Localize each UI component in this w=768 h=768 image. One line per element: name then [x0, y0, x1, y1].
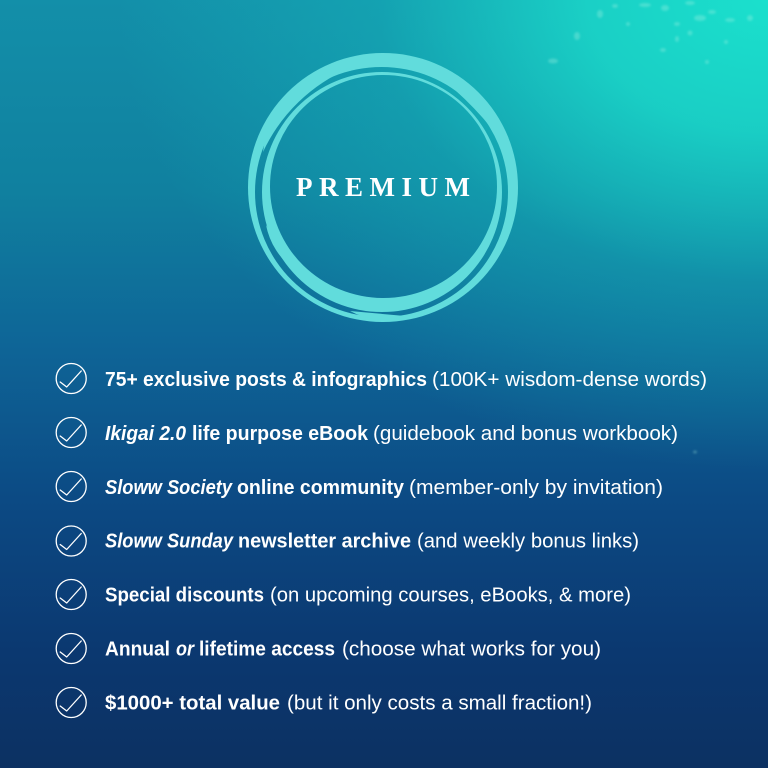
icon: check circle [56, 526, 86, 556]
list item 7 [56, 688, 592, 718]
list item 6 [56, 634, 601, 664]
background bubbles [548, 1, 753, 454]
list item 4: (and weekly bonus links) [417, 530, 639, 552]
icon: check circle [56, 580, 86, 610]
list item 7: (but it only costs a small fraction!) [287, 692, 592, 714]
circle emblem [248, 53, 518, 322]
list item 6: or [176, 638, 195, 660]
list item 4: newsletter archive [238, 530, 411, 552]
list item 2: life purpose eBook [192, 423, 369, 445]
title: PREMIUM [296, 172, 470, 202]
icon: check circle [56, 472, 86, 502]
icon: check circle [56, 634, 86, 664]
list item 4: Sloww Sunday [105, 530, 234, 552]
icon: check circle [56, 418, 86, 448]
icon: check circle [56, 688, 86, 718]
list item 5: (on upcoming courses, eBooks, & more) [270, 584, 631, 606]
icon: check circle [56, 364, 86, 394]
list item 3 [56, 472, 663, 502]
list item 6: Annual [105, 638, 170, 660]
list item 1: 75+ exclusive posts & infographics [105, 369, 427, 391]
list item 6: (choose what works for you) [342, 638, 601, 660]
list item 2: Ikigai 2.0 [105, 423, 186, 445]
list item 2: (guidebook and bonus workbook) [373, 423, 678, 445]
list item 1 [56, 364, 707, 394]
list item 7: $1000+ total value [105, 692, 280, 714]
list item 2 [56, 418, 678, 448]
list item 3: online community [237, 477, 405, 499]
list item 3: Sloww Society [105, 477, 233, 499]
list item 6: lifetime access [199, 638, 335, 660]
list item 5 [56, 580, 631, 610]
list item 1: (100K+ wisdom-dense words) [432, 369, 707, 391]
list item 4 [56, 526, 639, 556]
list item 5: Special discounts [105, 584, 264, 606]
list item 3: (member-only by invitation) [409, 477, 663, 499]
